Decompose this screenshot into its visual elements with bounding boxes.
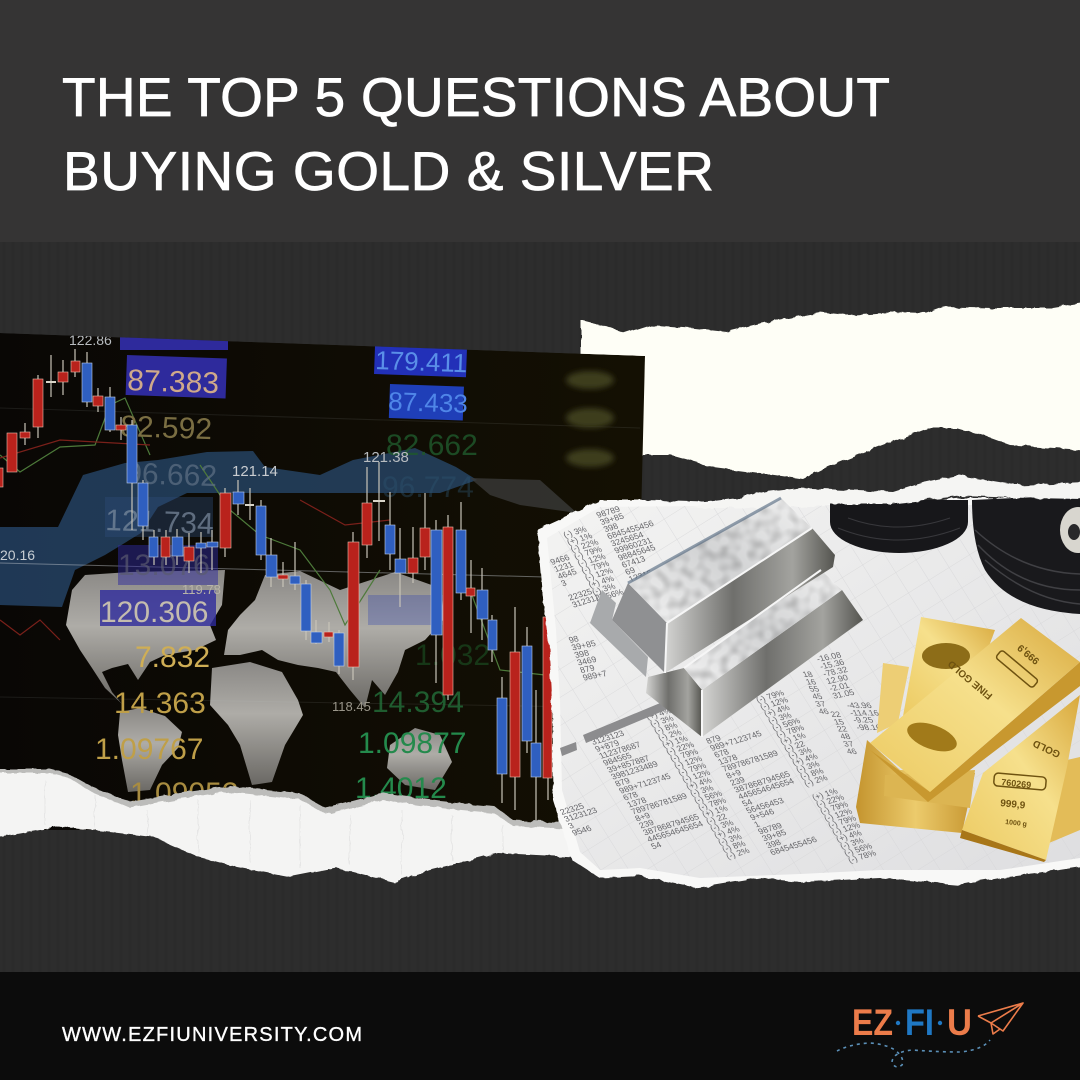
financial table text: (-) 78% — [846, 848, 878, 865]
financial table text: 9+879 — [593, 738, 621, 754]
financial table text: -2.01 — [828, 680, 851, 693]
price labels: 1.032 — [415, 639, 490, 672]
financial table text: 398 — [602, 521, 620, 534]
financial table text: 789786781589 — [720, 748, 780, 774]
financial table text: (-) 3% — [590, 581, 617, 597]
financial table text: 1 — [752, 819, 762, 829]
financial table text: (-) 12% — [680, 767, 712, 784]
website url: WWW.EZFIUNIVERSITY.COM — [62, 1024, 362, 1046]
financial table text: (-) 22% — [664, 740, 696, 757]
financial table text: 879 — [704, 733, 723, 746]
price labels: 20.16 — [0, 547, 35, 563]
financial table text: (-) 3% — [766, 710, 794, 726]
financial table text: 39+85 — [598, 511, 626, 527]
financial table text: 54 — [740, 797, 754, 808]
financial table text: (-) 8% — [798, 766, 826, 781]
financial table text: 3469 — [576, 654, 598, 667]
financial table text: 678 — [712, 747, 731, 760]
financial table text: 989+7123745 — [617, 771, 673, 795]
financial table text: 398 — [573, 648, 591, 660]
financial table text: 37 — [814, 699, 827, 708]
financial table text: (-) 56% — [842, 841, 874, 858]
price labels: 179.411 — [375, 345, 468, 378]
financial table text: -9.25 — [851, 715, 875, 725]
financial table text: 37 — [842, 739, 855, 748]
financial table text: (-) 2% — [802, 773, 830, 788]
financial table text: 98 — [567, 634, 580, 645]
financial table text: (-) 3% — [786, 745, 814, 760]
price labels: 87.383 — [127, 364, 220, 400]
financial table text: 1378 — [625, 795, 648, 809]
financial table text: (+) 4% — [834, 828, 864, 844]
price labels: 1.09877 — [358, 727, 466, 760]
financial table text: (-) 2% — [656, 727, 684, 743]
price labels: 1.09767 — [95, 733, 203, 766]
financial table text: (-) 79% — [826, 813, 858, 830]
financial table text: 445654645654 — [645, 819, 705, 844]
financial table text: 9466 — [548, 552, 571, 567]
title — [62, 66, 890, 202]
financial table text: 98789 — [594, 504, 622, 520]
cloud band — [0, 448, 577, 607]
financial table text: (-) 8% — [720, 838, 748, 854]
logo: EZ-FI-U with paper plane: FI — [905, 1002, 934, 1043]
gold bars: 760269 — [1001, 777, 1032, 790]
financial table text: 387868794565 — [641, 812, 701, 837]
price labels: 121.734 — [105, 504, 214, 541]
price labels: 120.306 — [100, 596, 208, 629]
red candles — [0, 361, 552, 778]
gold bars: 1000 g — [1005, 819, 1027, 828]
financial table text: 98789 — [756, 820, 784, 836]
financial table text: (-) 12% — [758, 695, 790, 712]
financial table text: (-) 79% — [818, 799, 850, 816]
financial table text: 445654645654 — [736, 776, 796, 801]
financial table text: 56456453 — [744, 795, 786, 815]
financial table text: 99960231 — [612, 535, 654, 555]
torn white paper top right — [581, 303, 1080, 479]
price labels: 121.14 — [232, 463, 278, 480]
price labels: 96.774 — [382, 471, 474, 504]
price labels: 7.832 — [135, 641, 210, 674]
financial table text: (-) 12% — [822, 806, 854, 823]
financial table text: (+) 1% — [565, 530, 594, 547]
faint right labels — [566, 371, 614, 467]
financial table text: (+) 4% — [587, 573, 616, 590]
financial table text: -78.32 — [821, 664, 849, 679]
financial table text: (-) 3% — [794, 759, 822, 774]
financial table text: 39+85 — [570, 638, 597, 652]
financial table text: 8+9 — [633, 810, 652, 823]
financial table text: 3123123 — [589, 728, 626, 747]
financial table text: 3981233489 — [609, 759, 660, 782]
table header bars — [560, 701, 668, 756]
photo paper — [537, 497, 1080, 888]
price labels: 96.662 — [125, 457, 218, 493]
financial table text: 55 — [807, 684, 821, 694]
price labels: 1.09052 — [130, 777, 238, 810]
financial table text: 6845455456 — [605, 518, 656, 541]
financial table text: (+) 4% — [644, 705, 674, 722]
financial table text: (-) 12% — [830, 820, 862, 837]
financial table text: 46 — [817, 706, 831, 716]
price labels: 87.433 — [388, 386, 468, 419]
title: THE TOP 5 QUESTIONS ABOUT — [62, 66, 890, 128]
financial table text: 879 — [578, 663, 596, 675]
gold bars — [856, 617, 1080, 862]
logo: EZ-FI-U with paper plane: EZ — [852, 1002, 893, 1043]
financial table text: 3245654 — [609, 530, 645, 548]
financial table text: (-) 22 — [704, 811, 729, 826]
financial table text: (-) 8% — [652, 720, 680, 736]
financial table text: 22325 — [558, 801, 586, 817]
logo: EZ-FI-U with paper plane: U — [947, 1002, 972, 1043]
financial table text: 398 — [764, 837, 783, 850]
financial table text: 989+7 — [581, 668, 609, 682]
silver bars — [590, 498, 863, 737]
financial table text: 39+857887 — [605, 753, 652, 775]
financial table text: (+) 4% — [684, 775, 714, 791]
financial table text: 8+9 — [724, 768, 743, 781]
financial table text: (+) 1% — [700, 803, 730, 819]
price labels — [0, 332, 490, 810]
financial table text: 45 — [810, 692, 824, 701]
financial table text: 54 — [649, 840, 663, 851]
oil barrels — [830, 495, 1080, 614]
financial table text: (-) 3% — [838, 835, 866, 851]
financial table text: (-) 78% — [774, 723, 806, 740]
financial table text: 789786781589 — [629, 791, 689, 816]
financial table text: 98845645 — [616, 542, 657, 563]
price labels: 1.4012 — [355, 772, 447, 805]
financial table text: -114.16 — [848, 708, 881, 717]
gold bars: FINE GOLD — [946, 658, 995, 701]
financial table text: (+) 1% — [660, 733, 690, 750]
price labels: 121.38 — [363, 449, 409, 466]
financial table text: (-) 3% — [708, 817, 736, 833]
financial table text: 3 — [566, 821, 576, 831]
financial table text: 18 — [801, 670, 815, 679]
textured middle background — [0, 242, 1080, 972]
logo: EZ-FI-U with paper plane — [837, 1002, 1023, 1067]
financial table text: (-) 79% — [579, 558, 611, 575]
financial table text: (-) 12% — [576, 551, 608, 568]
financial table text: (-) 79% — [572, 544, 604, 561]
price labels: 14.394 — [372, 686, 464, 719]
financial table text: -15.36 — [818, 657, 846, 671]
gold bars: 999,9 — [1015, 641, 1042, 666]
financial table text: 15 — [832, 717, 846, 726]
financial table text: 9+546 — [748, 806, 776, 822]
financial table text: -16.08 — [815, 650, 843, 664]
torn white paper bottom left — [0, 769, 575, 882]
financial table text: 22325 — [566, 586, 594, 602]
horizontal price lines — [0, 408, 640, 708]
financial table text: (-) 56% — [770, 716, 802, 733]
candlestick wicks — [25, 349, 548, 820]
financial table text: (-) 3% — [561, 524, 589, 540]
financial table text: 3123123 — [562, 805, 599, 824]
financial table text: (-) 2% — [724, 845, 752, 861]
financial table text: -98.16 — [854, 723, 883, 732]
title: BUYING GOLD & SILVER — [63, 140, 714, 202]
header band — [0, 0, 1080, 242]
financial table text: 1231 — [552, 559, 575, 574]
financial table text: 984565 — [601, 750, 634, 768]
price labels: 13.076 — [118, 549, 210, 582]
footer band — [0, 972, 1080, 1080]
financial table text: 39+85 — [760, 827, 788, 843]
financial table text: (-) 56% — [594, 587, 626, 604]
gold bars: GOLD — [1031, 737, 1062, 759]
financial table text: (-) 3% — [716, 831, 744, 847]
financial table text: (+) 1% — [810, 786, 840, 802]
financial table text: (-) 3% — [648, 713, 676, 729]
indicator lines — [0, 398, 545, 675]
financial table text: -43.96 — [845, 701, 873, 710]
financial table text: 16 — [804, 677, 818, 686]
financial table text: (-) 78% — [696, 795, 728, 812]
price labels: 82.592 — [120, 410, 213, 446]
financial table text: (+) 4% — [790, 751, 820, 767]
price labels: 119.78 — [182, 582, 221, 597]
dashed flight path — [837, 1040, 990, 1067]
financial table text: (-) 79% — [668, 746, 700, 763]
financial table text: 239 — [637, 817, 656, 830]
financial table text: 678 — [621, 789, 640, 802]
financial table text: 46 — [845, 746, 859, 756]
financial table text: 112378687 — [597, 740, 643, 761]
financial table text: (-) 12% — [672, 753, 704, 770]
financial table text: (+) 4% — [712, 824, 742, 840]
financial table text: 4645 — [556, 566, 579, 581]
price labels: 122.86 — [69, 332, 112, 348]
world map — [66, 570, 452, 792]
icon: paper plane — [978, 1003, 1023, 1034]
financial table text: (-) 22% — [814, 792, 846, 809]
photo panel: silver and gold bars — [537, 475, 1080, 888]
price labels: 14.363 — [114, 687, 206, 720]
financial table text: 22 — [835, 724, 849, 734]
blue candles — [82, 363, 541, 777]
financial table text: 989+7123745 — [708, 729, 764, 753]
financial table text: 67413 — [620, 554, 647, 570]
financial table text: 69 — [623, 565, 637, 577]
financial table text: 3 — [559, 578, 568, 588]
financial table text: (-) 79% — [754, 688, 786, 705]
financial table text: 239 — [728, 775, 747, 787]
trading chart panel — [0, 332, 645, 840]
price labels: 82.662 — [386, 429, 478, 462]
financial table text: 22 — [829, 710, 843, 719]
white doji candles — [46, 382, 385, 505]
financial table text: (-) 3% — [688, 783, 716, 798]
gold bars: 999,9 — [1000, 798, 1026, 812]
financial table text: (+) 4% — [762, 702, 792, 719]
financial table text: (-) 12% — [583, 565, 615, 583]
financial table text: 1378 — [716, 752, 739, 767]
financial table text — [548, 497, 887, 865]
financial table text: 9546 — [570, 823, 593, 838]
financial table text: (-) 22 — [782, 739, 807, 753]
financial table text: 12.90 — [824, 672, 850, 686]
financial table text: (+) 1% — [778, 730, 808, 746]
financial table text: (-) 79% — [676, 760, 708, 777]
financial table text: 48 — [838, 732, 852, 741]
torn white lip on top of photo — [690, 475, 1080, 508]
financial table text: 3123123 — [570, 591, 607, 610]
financial table text: 387868794565 — [732, 769, 792, 794]
financial table text: 31.05 — [831, 687, 856, 701]
financial table text: 6845455456 — [768, 834, 819, 857]
financial table text: 879 — [613, 776, 632, 788]
financial table text: 12318 — [627, 568, 654, 584]
financial table text: (-) 22% — [569, 537, 600, 554]
price labels: 118.45 — [332, 699, 371, 714]
financial table text: (-) 56% — [692, 788, 724, 805]
